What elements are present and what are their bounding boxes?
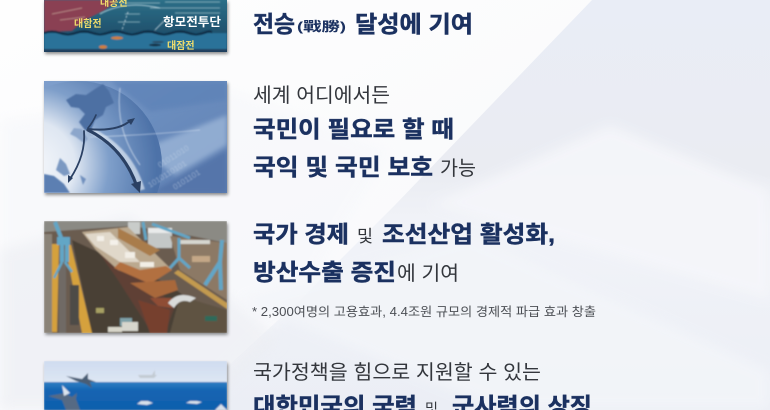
binary digits: 1010110101 (146, 159, 189, 190)
text block: item 3 (252, 221, 596, 319)
image: globe with arrows (42, 80, 230, 198)
label: 항모전투단: 항모전투단 (163, 14, 221, 29)
text block: item 1: 달성에 기여 (355, 11, 473, 37)
binary digits (148, 146, 200, 190)
icon: ships (137, 401, 227, 410)
text block: item 1: (戰勝) (297, 19, 346, 34)
image: shipyard (44, 221, 227, 333)
binary digits: 01011010 (156, 143, 191, 170)
icon: arrows from Korea (70, 115, 137, 187)
hull (102, 256, 174, 323)
text block: item 3: 국가 경제 (253, 221, 349, 247)
text block: item 2: 국민이 필요로 할 때 (253, 116, 454, 142)
text block: item 1: 전승 (253, 11, 295, 37)
text block: item 1 (253, 11, 473, 37)
icon: jet 1 (66, 373, 96, 388)
deck (82, 226, 172, 271)
image: battle group diagram (44, 0, 227, 52)
text block: item 3: 에 기여 (397, 262, 459, 285)
image: fleet and aircraft (44, 361, 227, 410)
text block: item 2 (253, 84, 476, 180)
text block: item 3: * 2,300여명의 고용효과, 4.4조원 규모의 경제적 파급 효과 창출 (252, 305, 596, 319)
label: 대함전: 대함전 (74, 17, 102, 30)
dock walls (52, 244, 59, 332)
label: 대잠전: 대잠전 (167, 39, 195, 52)
text block: item 2: 세계 어디에서든 (253, 84, 390, 107)
icon: patrol plane (138, 371, 156, 378)
text block: item 3: 방산수출 증진 (253, 259, 396, 285)
text block: item 2: 국익 및 국민 보호 (253, 154, 433, 180)
cranes (54, 222, 222, 290)
text block: item 3: 조선산업 활성화, (382, 221, 555, 247)
dock floor (72, 240, 182, 333)
binary digits: 0101101 (171, 168, 202, 192)
gray shelter (168, 295, 196, 308)
text block: item 4: 국가정책을 힘으로 지원할 수 있는 (253, 361, 541, 384)
icon: jet 2 (48, 393, 80, 410)
text block: item 2: 가능 (440, 157, 476, 180)
text block: item 4 (253, 361, 592, 410)
text block: item 3: 및 (357, 227, 373, 246)
